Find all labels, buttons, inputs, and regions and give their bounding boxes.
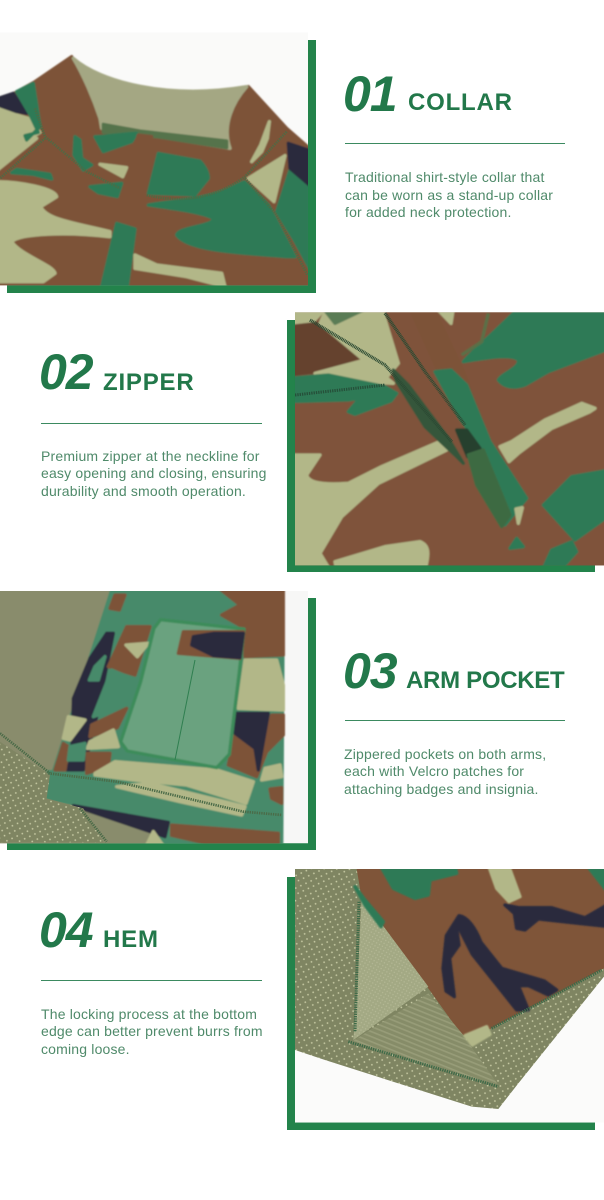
divider line bbox=[41, 980, 262, 981]
accent frame: collar photo bbox=[7, 40, 316, 293]
photo: camouflage collar bbox=[0, 54, 308, 286]
accent frame: pocket photo bbox=[7, 598, 316, 850]
panel: 03 arm pocket bbox=[0, 585, 316, 850]
text block: hem description: coming loose. bbox=[41, 1041, 130, 1057]
text block: collar description: can be worn as a stand-up collar bbox=[345, 187, 553, 203]
divider line bbox=[345, 720, 565, 721]
text block: zipper description: easy opening and closing, ensuring bbox=[41, 465, 267, 481]
heading: 04 hem bbox=[39, 902, 159, 958]
heading: 03 arm pocket: 03 bbox=[343, 643, 398, 699]
panel: 02 zipper bbox=[287, 305, 604, 572]
accent frame: zipper photo bbox=[287, 320, 595, 572]
heading: 04 hem: HEM bbox=[103, 926, 159, 953]
text block: pocket description: each with Velcro patches for bbox=[344, 763, 524, 779]
text block: pocket description: attaching badges and insignia. bbox=[344, 781, 539, 797]
divider line bbox=[345, 143, 565, 144]
text block: pocket description: Zippered pockets on both arms, bbox=[344, 746, 546, 762]
heading: 02 zipper: ZIPPER bbox=[103, 369, 194, 396]
text block: pocket description bbox=[344, 746, 546, 797]
heading: 04 hem: 04 bbox=[39, 902, 93, 958]
text block: zipper description bbox=[41, 448, 267, 499]
panel: 04 hem bbox=[287, 865, 604, 1130]
heading: 02 zipper: 02 bbox=[39, 344, 94, 400]
panel: 01 collar bbox=[0, 32, 316, 293]
photo: mesh hem bbox=[295, 865, 604, 1123]
text block: hem description bbox=[41, 1006, 263, 1057]
heading: 01 collar bbox=[343, 66, 513, 122]
text block: collar description: for added neck protection. bbox=[345, 204, 512, 220]
heading: 01 collar: COLLAR bbox=[408, 89, 513, 116]
text block: hem description: The locking process at the bottom bbox=[41, 1006, 257, 1022]
photo: sleeve arm pocket bbox=[0, 585, 308, 848]
heading: 02 zipper bbox=[39, 344, 194, 400]
text block: collar description bbox=[345, 169, 553, 220]
accent frame: hem photo bbox=[287, 877, 595, 1130]
text block: hem description: edge can better prevent burrs from bbox=[41, 1023, 263, 1039]
divider line bbox=[41, 423, 262, 424]
heading: 01 collar: 01 bbox=[343, 66, 397, 122]
heading: 03 arm pocket: ARM POCKET bbox=[406, 667, 565, 694]
heading: 03 arm pocket bbox=[343, 643, 565, 699]
text block: collar description: Traditional shirt-style collar that bbox=[345, 169, 545, 185]
text block: zipper description: durability and smooth operation. bbox=[41, 483, 246, 499]
text block: zipper description: Premium zipper at the neckline for bbox=[41, 448, 260, 464]
photo: camouflage zipper bbox=[288, 305, 604, 572]
